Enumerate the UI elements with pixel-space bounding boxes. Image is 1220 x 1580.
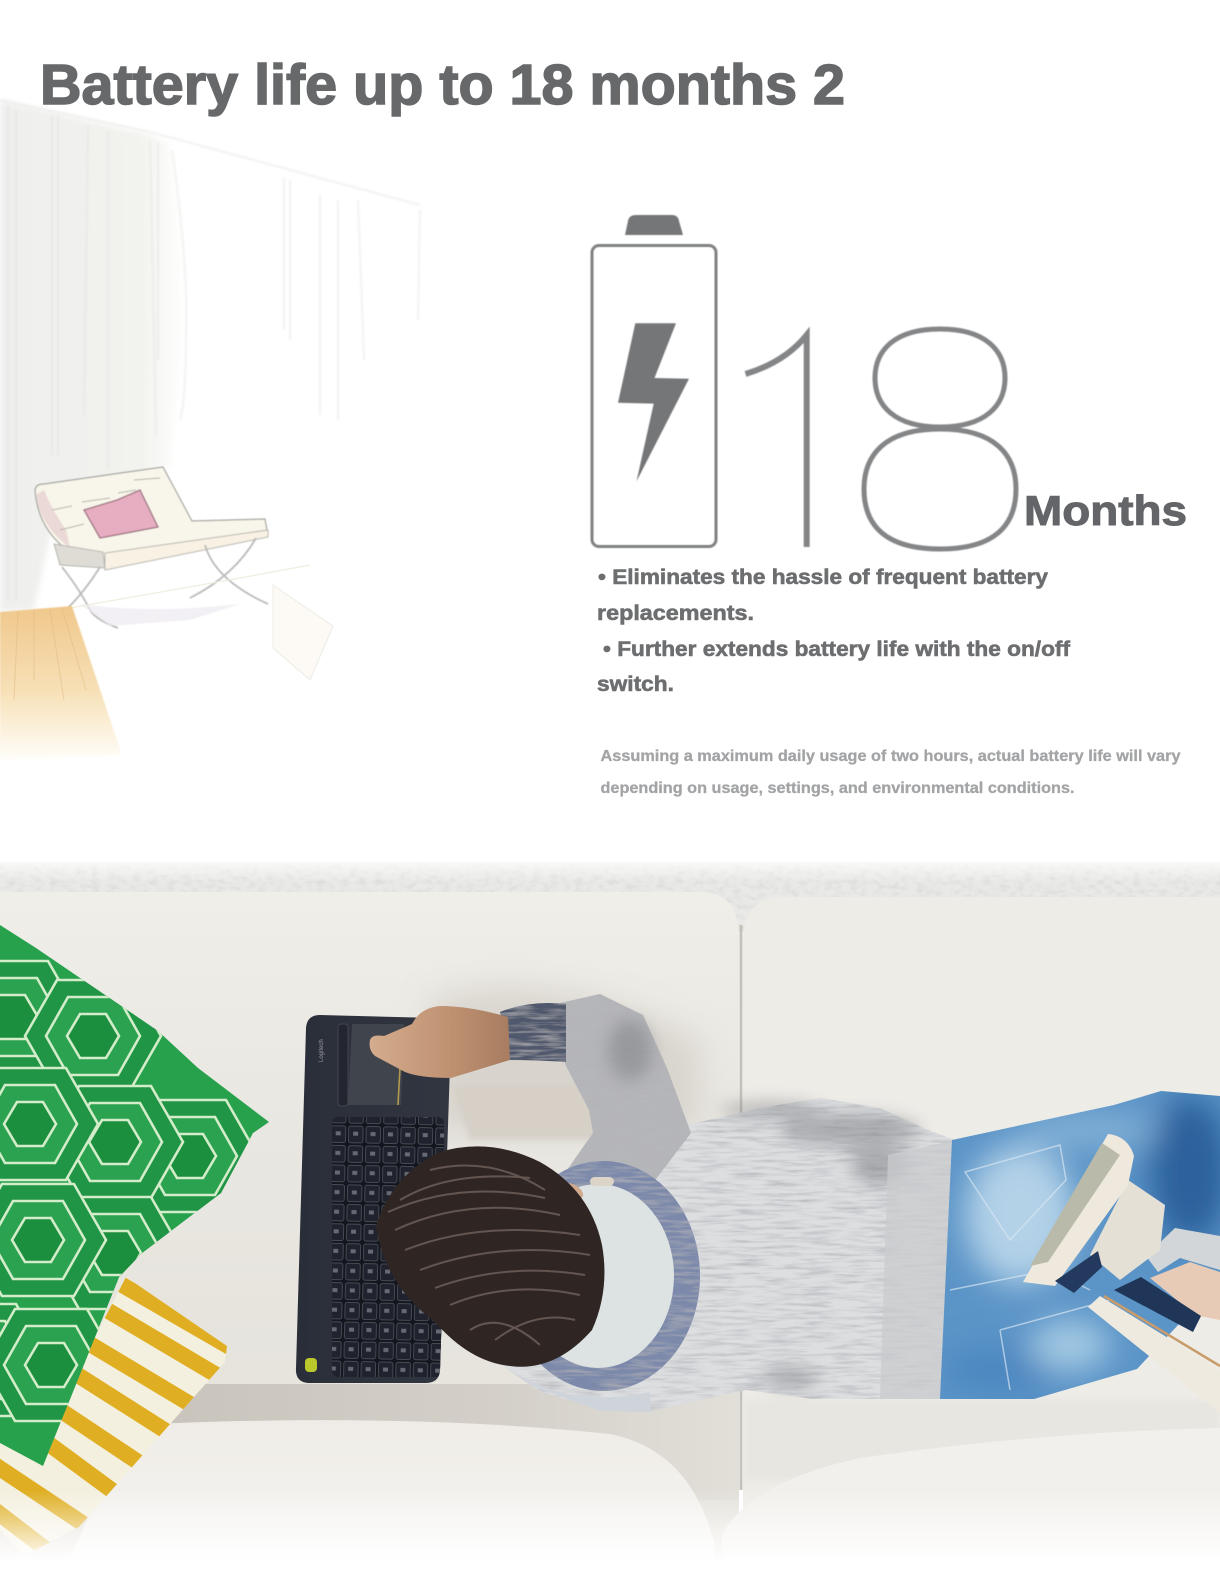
battery terminal [625,215,683,235]
sleeve cuff [500,1003,566,1062]
sofa seat left [0,892,739,1560]
brand mark: Logitech [319,1039,325,1062]
feature bullet list: switch. [597,672,674,696]
icon: battery with lightning bolt [592,215,716,546]
sweater hem [880,1140,955,1399]
illustration: sketched room with chair [0,100,420,760]
sofa seat right [743,897,1220,1560]
white inner shirt [522,1184,674,1368]
front cushion right [722,1428,1220,1580]
title: Battery life up to 18 months 2 [40,53,845,117]
lightning bolt [618,323,689,481]
touchpad [348,1024,404,1105]
ear and tag [556,1177,614,1203]
media buttons [338,1024,348,1106]
gap between seat and front cushion [150,1384,739,1500]
footnote: Assuming a maximum daily usage of two hours, actual battery life will vary [600,748,1181,765]
feature bullet list: replacements. [597,601,754,625]
wooden table [0,606,122,760]
feature bullet list: • Further extends battery life with the on/off [603,637,1071,661]
top fade [0,856,1220,882]
shoe one navy panel [1055,1251,1102,1293]
shoe two sole [1088,1296,1220,1413]
hair [376,1146,604,1367]
sofa back texture [0,862,1220,932]
shoes [1023,1134,1220,1413]
hand [370,1006,510,1078]
footnote: depending on usage, settings, and environmental conditions. [600,780,1074,797]
battery body [592,246,716,546]
floor line [70,565,310,608]
sweater body [506,1098,955,1411]
numeral 8 [864,329,1016,549]
ear [556,1179,586,1203]
chair [35,467,268,628]
drawstring tag [590,1177,614,1186]
collar and shirt [506,1161,700,1412]
green patterned pillow [0,920,280,1480]
collar outer lower blend [506,1368,651,1412]
big numeral 18 [746,329,1016,549]
bottom fade [0,1490,1220,1580]
feature bullet list [597,565,1071,696]
ankle [1150,1262,1220,1320]
shoe one upper [1090,1180,1165,1280]
footnote [600,748,1181,797]
power button [305,1358,317,1372]
sofa seam [740,925,742,1490]
months label: Months [1024,487,1187,534]
key grid [332,1117,444,1377]
sweater shadows [608,1020,920,1388]
blue ribbed collar [506,1161,700,1391]
numeral 1 [746,335,807,547]
trouser cuff [1146,1228,1220,1272]
shoe two navy panel [1114,1277,1201,1332]
gold touchpad edge [398,1030,402,1105]
photo: person with keyboard on sofa [0,856,1220,1580]
feature bullet list: • Eliminates the hassle of frequent battery [598,565,1048,589]
jeans [930,1085,1220,1405]
jeans stitching [950,1145,1110,1390]
sweater arm [560,994,691,1200]
shadow behind arm [452,1085,600,1140]
lower right sofa shade [745,1400,1220,1480]
front cushion left [60,1420,714,1580]
hair mass [376,1146,604,1367]
shoe one tread [1030,1143,1120,1266]
curtain wash [0,100,186,612]
seat shadows [430,987,700,1130]
panel on floor [273,585,333,680]
keyboard [296,1015,451,1383]
hair strands [388,1166,590,1345]
keyboard body [296,1015,451,1383]
shoe one sole [1023,1134,1134,1286]
curtain and rail lines [0,100,420,600]
yellow striped pillow [0,1277,227,1550]
